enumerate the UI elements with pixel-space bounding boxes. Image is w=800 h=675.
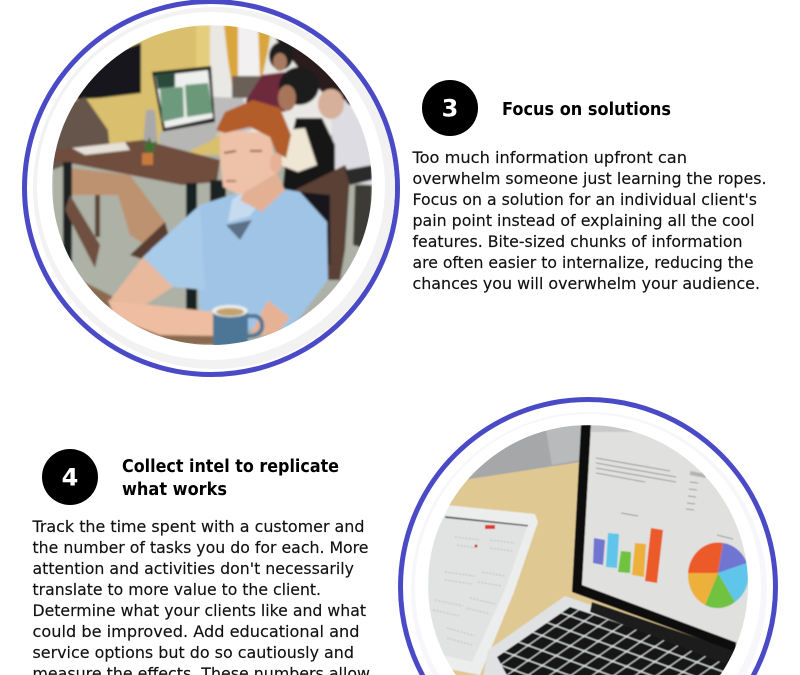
step 4 body text: could be improved. Add educational and	[32, 622, 360, 641]
bar chart	[593, 528, 663, 583]
keyboard	[497, 607, 735, 675]
step 3 body text: Too much information upfront can	[411, 148, 687, 167]
step 3 body text: are often easier to internalize, reducing the	[412, 253, 754, 272]
laptop screen	[582, 425, 750, 645]
step 3 body text	[411, 148, 766, 293]
step 3 body text: chances you will overwhelm your audience.	[412, 274, 760, 293]
step 4 body text	[32, 517, 370, 675]
step 3 number badge	[422, 80, 478, 136]
step 4 body text: service options but do so cautiously and	[32, 643, 354, 662]
pie chart	[688, 543, 749, 608]
laptop photo	[428, 425, 750, 675]
laptop screen bezel	[572, 425, 736, 652]
step 3 body text: overwhelm someone just learning the ropes.	[412, 169, 766, 188]
office photo	[52, 25, 372, 348]
step 4 number badge: 4	[62, 464, 78, 492]
photo circle: office worker	[24, 2, 398, 374]
step 4 body text: translate to more value to the client.	[32, 580, 321, 599]
step 4 body text: attention and activities don't necessarily	[32, 559, 354, 578]
photo circle: laptop with charts	[400, 400, 776, 675]
step 3 heading: Focus on solutions	[502, 99, 671, 120]
hinge	[590, 602, 736, 668]
tablet	[428, 505, 538, 675]
step 3 body text: Focus on a solution for an individual client's	[412, 190, 757, 209]
step 4 heading	[122, 456, 339, 500]
step 4 number badge	[42, 449, 98, 505]
step 4 body text: Determine what your clients like and what	[32, 601, 366, 620]
step 3 body text: features. Bite-sized chunks of information	[412, 232, 742, 251]
ring frame	[400, 400, 776, 675]
step 4 body text: Track the time spent with a customer and	[32, 517, 365, 536]
step 3 number badge: 3	[442, 94, 458, 122]
step 3 body text: pain point instead of explaining all the cool	[412, 211, 754, 230]
step 4 heading: Collect intel to replicate	[122, 456, 339, 477]
ring frame	[24, 2, 398, 374]
step 4 body text: the number of tasks you do for each. More	[32, 538, 368, 557]
step 4 heading: what works	[122, 479, 227, 500]
laptop base	[482, 596, 624, 675]
